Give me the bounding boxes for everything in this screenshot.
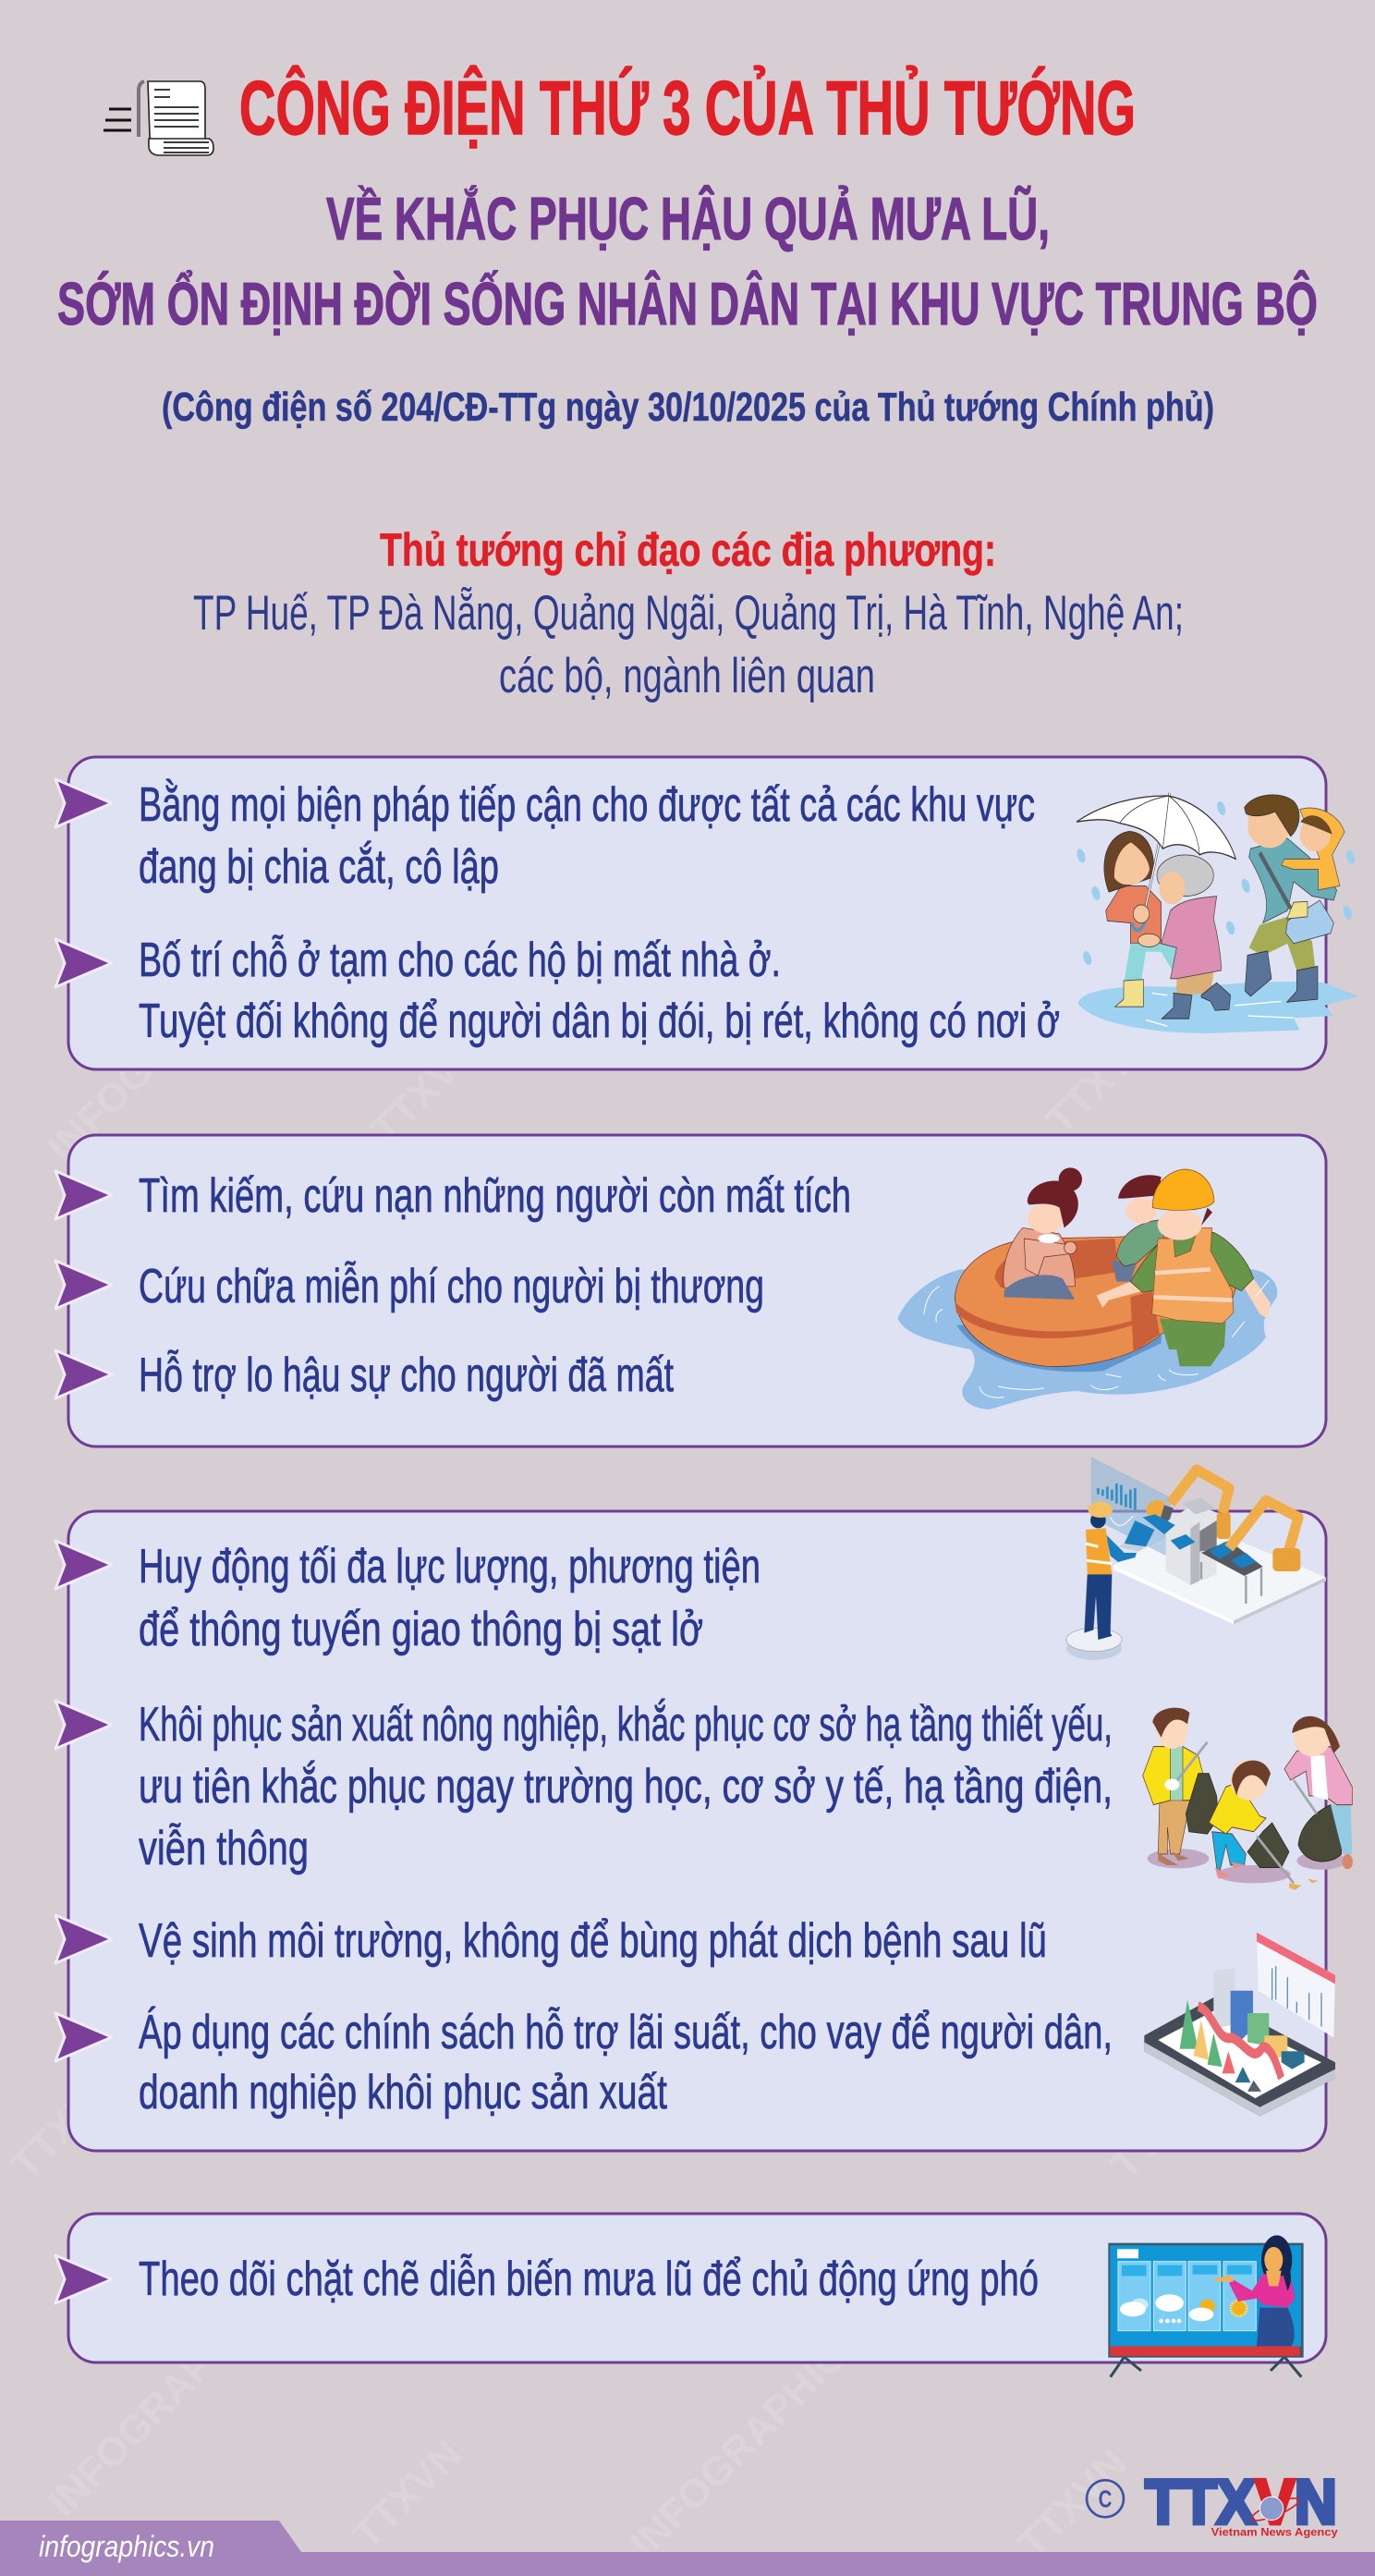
bullet: free treatment: Cứu chữa miễn phí cho người bị thương (139, 1260, 764, 1313)
illustration: weather presenter on TV (1108, 2235, 1304, 2377)
bullet: restore production (55, 1698, 1113, 1875)
bullet: restore production: viễn thông (139, 1822, 309, 1875)
bullet: clear transport (55, 1540, 761, 1656)
logo: TTXVN copyright mark: Vietnam News Agency (1211, 2525, 1338, 2538)
bullet: clear transport: Huy động tối đa lực lượng, phương tiện (139, 1540, 761, 1593)
icon: document scroll (103, 81, 213, 155)
directive heading: Thủ tướng chỉ đạo các địa phương: (380, 524, 996, 576)
infographic canvas: TTXVN (1009, 2440, 1136, 2567)
bullet: search and rescue: Tìm kiếm, cứu nạn những người còn mất tích (139, 1169, 851, 1223)
bullet: free treatment (55, 1260, 764, 1313)
illustration: family walking in flood rain (1076, 793, 1358, 1033)
bullet: shelter: Tuyệt đối không để người dân bị đói, bị rét, không có nơi ở (139, 995, 1060, 1048)
bullet: monitor rain and flood (55, 2252, 1039, 2306)
bullet: funeral support: Hỗ trợ lo hậu sự cho người đã mất (139, 1349, 674, 1402)
subtitle: VỀ KHẮC PHỤC HẬU QUẢ MƯA LŨ, (326, 185, 1050, 252)
bullet: search and rescue (55, 1169, 851, 1223)
panel: shelter and access (55, 757, 1358, 1069)
panel: monitoring (55, 2214, 1326, 2377)
illustration: tablet with 3D charts (1144, 1933, 1335, 2116)
infographic canvas: INFOGRAPHICS (621, 2314, 874, 2567)
infographic canvas: TTXVN (1037, 1017, 1163, 1143)
bullet: access (55, 778, 1035, 894)
subtitle (57, 185, 1318, 337)
footer site name: infographics.vn (39, 2530, 214, 2563)
panel: rescue and medical (55, 1135, 1326, 1447)
illustration: rescue raft (898, 1167, 1277, 1410)
infographic canvas: TTXVN (1101, 2061, 1228, 2188)
infographic canvas: TTXVN (344, 2431, 470, 2558)
logo: TTXVN copyright mark: TTXVN (1145, 2467, 1337, 2537)
bullet: access: đang bị chia cắt, cô lập (139, 840, 499, 894)
bullet: shelter: Bố trí chỗ ở tạm cho các hộ bị mất nhà ở. (139, 934, 781, 987)
recipients text (193, 586, 1184, 703)
bullet: funeral support (55, 1349, 674, 1402)
infographic canvas: TTXVN (362, 1026, 489, 1153)
infographic canvas: TTXVN (2, 2061, 128, 2188)
illustration: engineer with factory robots (1066, 1457, 1326, 1660)
logo: TTXVN copyright mark: C (1099, 2485, 1113, 2513)
bullet: financial support (55, 2006, 1113, 2119)
infographic canvas: INFOGRAPHICS (39, 919, 292, 1171)
bullet: sanitation: Vệ sinh môi trường, không để bùng phát dịch bệnh sau lũ (139, 1914, 1047, 1968)
bullet: clear transport: để thông tuyến giao thông bị sạt lở (139, 1603, 703, 1656)
bullet: monitor rain and flood: Theo dõi chặt chẽ diễn biến mưa lũ để chủ động ứng phó (139, 2252, 1039, 2306)
infographic canvas: INFOGRAPHICS (39, 2273, 292, 2525)
bullet: sanitation (55, 1914, 1047, 1968)
bullet: financial support: doanh nghiệp khôi phục sản xuất (139, 2066, 667, 2119)
panel: recovery measures (55, 1457, 1353, 2151)
illustration: people collecting rubbish (1143, 1708, 1353, 1890)
bullet: access: Bằng mọi biện pháp tiếp cận cho được tất cả các khu vực (139, 778, 1035, 832)
bullet: shelter (55, 934, 1060, 1048)
footer band (0, 2521, 1375, 2576)
recipients text: các bộ, ngành liên quan (499, 649, 875, 703)
